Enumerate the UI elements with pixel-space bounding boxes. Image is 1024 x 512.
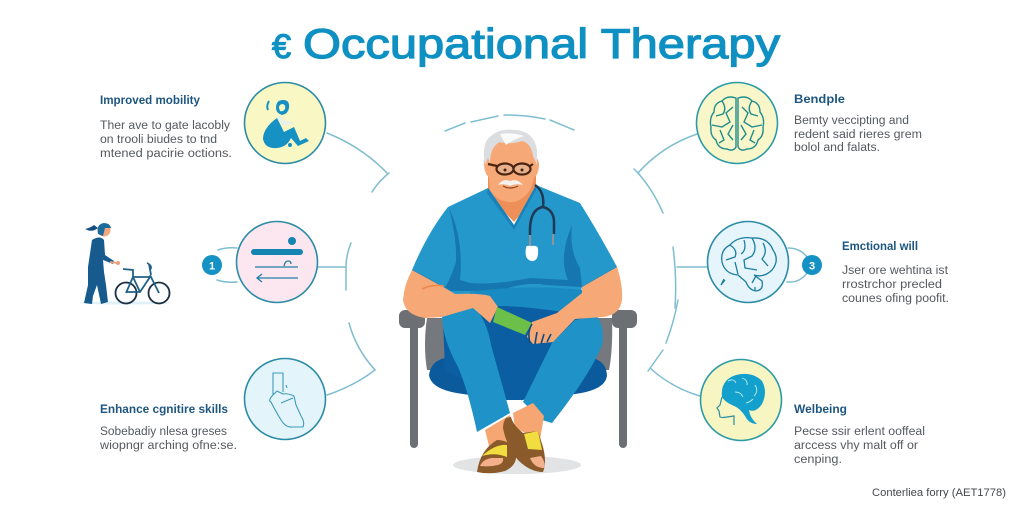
left sandal — [477, 440, 516, 473]
text block: redent said rieres grem — [794, 129, 922, 141]
icon: head with blue brain — [700, 360, 782, 440]
head — [484, 130, 539, 202]
right hand detail — [529, 324, 551, 344]
text block: Jser ore wehtina ist — [842, 265, 949, 277]
panel: improved mobility — [100, 82, 326, 164]
icon: brain side view — [708, 222, 788, 302]
panel: emotional well — [708, 222, 949, 305]
icon: person with bicycle — [80, 223, 170, 304]
text block — [794, 115, 922, 154]
text block: bolol and falats. — [794, 142, 880, 154]
text block — [100, 120, 232, 160]
glasses — [488, 164, 533, 174]
text block: Ther ave to gate lacobly — [100, 120, 230, 132]
panel: balance and movement — [202, 222, 318, 302]
text block: cenping. — [794, 454, 842, 466]
panel: enhance cognitive skills — [99, 358, 325, 452]
title: € — [272, 28, 291, 66]
text block: Pecse ssir erlent ooffeal — [794, 426, 925, 438]
green band — [493, 307, 532, 335]
neck and chest — [488, 176, 536, 222]
right ankle — [513, 403, 544, 440]
stethoscope — [526, 185, 554, 261]
text block: arccess vhy malt off or — [794, 440, 918, 452]
icon: brain top view — [696, 82, 778, 164]
text block: rrostrchor precled — [842, 279, 942, 291]
left arm — [403, 270, 498, 323]
panel: right top brain — [696, 82, 922, 164]
badge: number 3 — [802, 255, 822, 275]
heading: Enhance cgnitire skills — [100, 404, 228, 416]
right leg — [523, 316, 603, 423]
shadow — [453, 456, 581, 474]
text block: Bemty veccipting and — [794, 115, 909, 127]
central figure: seated therapist — [399, 130, 637, 474]
bicycle — [116, 263, 170, 304]
heading: Emctional will — [842, 241, 918, 253]
text block — [99, 426, 237, 452]
right arm — [527, 267, 622, 344]
right sandal — [503, 417, 545, 472]
badge: number 3: 3 — [809, 260, 815, 272]
text block: on trooli biudes to tnd — [100, 134, 217, 146]
belly — [470, 287, 583, 325]
footer credit: Conterliea forry (AET1778) — [872, 487, 1006, 499]
shirt — [412, 185, 617, 304]
panel: wellbeing — [700, 360, 925, 466]
heading: Welbeing — [794, 404, 847, 416]
text block: Sobebadiy nlesa greses — [100, 426, 227, 438]
icon: seated person — [244, 82, 326, 164]
icon: hand holding device — [244, 358, 326, 440]
left leg — [442, 306, 510, 432]
text block: counes ofing poofit. — [842, 293, 949, 305]
badge: number 1: 1 — [209, 260, 215, 272]
icon: lines and arrows — [236, 222, 318, 302]
chair — [399, 310, 637, 448]
text block — [794, 426, 925, 466]
left ankle — [485, 415, 517, 450]
title: Occupational Therapy — [303, 20, 780, 67]
heading: Improved mobility — [100, 95, 201, 107]
dark pants centre — [443, 306, 598, 400]
text block — [842, 265, 949, 305]
moustache — [498, 180, 523, 186]
heading: Bendple — [794, 94, 845, 106]
text block: mtened pacirie octions. — [100, 148, 232, 160]
connector lines — [217, 115, 807, 396]
girl — [84, 223, 120, 304]
text block: wiopngr arching ofne:se. — [99, 440, 237, 452]
